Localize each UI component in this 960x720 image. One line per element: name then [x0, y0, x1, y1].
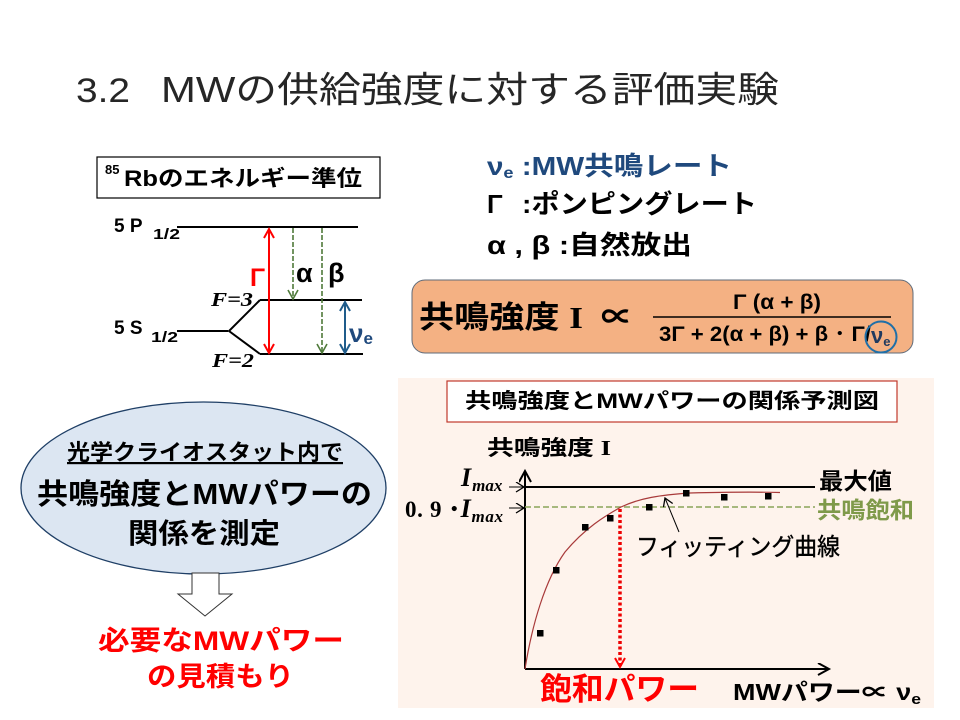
nu e term: e	[883, 334, 890, 349]
legend row: MW resonance rate: e	[503, 165, 514, 182]
label: I max: I	[461, 463, 471, 492]
label: beta: β	[328, 258, 344, 288]
legend: rate definitions	[487, 151, 757, 260]
fraction numerator: Γ (α + β)	[733, 291, 821, 314]
arrow: alpha decay	[292, 228, 294, 299]
data points	[537, 490, 772, 636]
arrow: beta decay	[321, 228, 323, 353]
callout line 1: 共鳴強度とMWパワーの	[37, 478, 372, 511]
saturation power drop arrow	[618, 509, 622, 667]
y axis label: 共鳴強度 I	[487, 436, 611, 460]
energy level lines	[177, 227, 363, 354]
saturation line	[525, 506, 815, 508]
label: resonance saturation: 共鳴飽和	[817, 497, 914, 523]
chart heading	[447, 381, 897, 422]
arrow: 0.9 I max	[509, 507, 524, 509]
callout heading: 光学クライオスタット内で	[67, 440, 343, 465]
title: MWの供給強度に対する評価実験	[161, 69, 779, 110]
conclusion line 2: の見積もり	[147, 662, 294, 692]
label: nu e: e	[363, 329, 373, 348]
label: F=2: F=2	[211, 350, 254, 372]
label: 5S subscript: 1/2	[151, 329, 178, 346]
legend row: pumping rate: Γ	[487, 189, 503, 219]
label: x axis: e	[911, 691, 921, 708]
arrow: hollow down	[178, 573, 232, 616]
legend row: spontaneous emission: α , β :自然放出	[487, 230, 692, 260]
fitting curve	[525, 492, 780, 669]
panel: resonance intensity formula	[412, 280, 913, 353]
label: 5P subscript: 1/2	[153, 226, 180, 243]
pointer to fitting curve	[665, 498, 679, 532]
fraction denominator: 3Γ + 2(α + β) + β ･ Γ/	[659, 323, 871, 346]
circle highlight	[866, 322, 896, 352]
label: gamma: Γ	[250, 264, 265, 292]
heading: energy levels	[97, 157, 380, 198]
formula left side: 共鳴強度 I	[419, 300, 583, 335]
label: F=3: F=3	[210, 289, 253, 311]
conclusion: required MW power: 必要なMWパワー	[98, 626, 344, 656]
fraction bar	[653, 316, 891, 318]
arrow: pumping rate	[268, 229, 270, 353]
panel: energy level diagram	[97, 157, 380, 372]
nu e term: ν	[871, 323, 883, 348]
callout line 2: 関係を測定	[128, 518, 280, 549]
legend row: MW resonance rate: ν	[487, 151, 501, 181]
label: 0.9 I max: 0. 9 ･I	[405, 494, 471, 523]
label: I max: max	[472, 476, 503, 495]
label: nu e: ν	[349, 318, 363, 348]
label: alpha: α	[296, 258, 313, 288]
label: x axis: MWパワー∝ ν	[733, 679, 885, 705]
legend row: MW resonance rate: :MW共鳴レート	[514, 151, 732, 181]
chart heading: 共鳴強度とMWパワーの関係予測図	[465, 390, 879, 413]
label: 0.9 I max: max	[471, 507, 504, 526]
axes	[525, 471, 829, 669]
label: 5P 1/2: 5 P	[114, 216, 143, 237]
label: fitting curve: フィッティング曲線	[636, 534, 840, 561]
label: 5S 1/2: 5 S	[114, 318, 143, 339]
heading: energy levels: 85	[105, 162, 119, 177]
conclusion: required MW power	[98, 626, 344, 692]
proportional symbol: ∝	[601, 299, 633, 335]
arrow: I max	[509, 486, 524, 488]
callout: measurement in cryostat	[21, 402, 386, 574]
heading: energy levels: Rbのエネルギー準位	[124, 166, 362, 191]
max line	[525, 486, 815, 488]
title: 3.2	[76, 72, 130, 110]
label: maximum: 最大値	[819, 468, 892, 494]
panel: prediction chart	[398, 378, 934, 708]
legend row: pumping rate: :ポンピングレート	[522, 189, 757, 219]
label: saturation power: 飽和パワー	[540, 672, 699, 707]
arrow: MW resonance	[344, 302, 346, 353]
